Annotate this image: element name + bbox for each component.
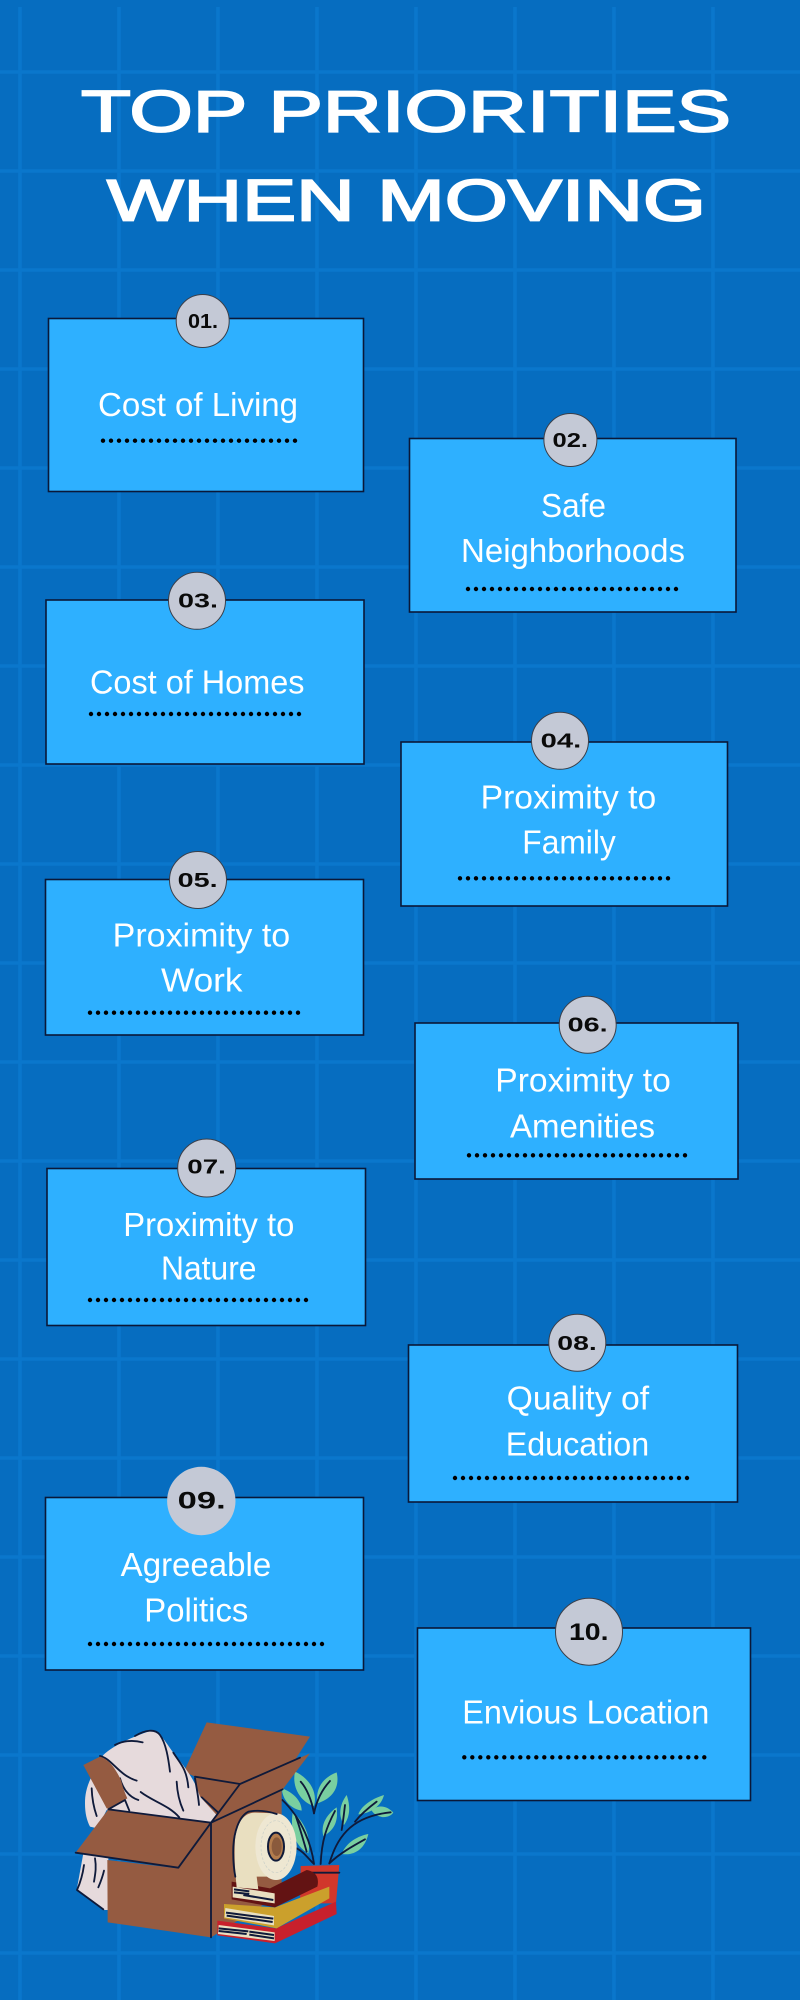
panel: 06 Proximity to Amenities: Amenities — [510, 1108, 655, 1145]
panel: 07 Proximity to Nature: Proximity to — [123, 1206, 294, 1243]
panel: 04 Proximity to Family: Proximity to — [481, 778, 656, 815]
panel: 08 Quality of Education: Quality of — [507, 1379, 650, 1416]
icon: tape roll — [233, 1811, 297, 1889]
panel: 04 Proximity to Family — [401, 712, 728, 906]
panel: 06 Proximity to Amenities: Proximity to — [495, 1062, 671, 1099]
panel: 01 Cost of Living — [48, 294, 364, 492]
panel: 08 Quality of Education — [408, 1314, 738, 1502]
title — [81, 80, 731, 234]
icon: stack of books — [217, 1870, 337, 1943]
panel: 08 Quality of Education: 08. — [557, 1333, 597, 1355]
panel: 07 Proximity to Nature — [47, 1139, 366, 1326]
panel: 02 Safe Neighborhoods: Safe — [541, 487, 606, 524]
panel: 10 Envious Location: Envious Location — [462, 1693, 709, 1730]
panel: 05 Proximity to Work: 05. — [178, 870, 218, 892]
panel: 05 Proximity to Work: Work — [161, 962, 243, 999]
panel: 10 Envious Location: 10. — [569, 1619, 608, 1646]
icon: plant pot — [300, 1865, 339, 1903]
panel: 10 Envious Location — [418, 1598, 750, 1800]
panel: 06 Proximity to Amenities — [415, 996, 738, 1179]
panel: 09 Agreeable Politics: Politics — [144, 1592, 248, 1629]
panel: 05 Proximity to Work: Proximity to — [113, 917, 290, 954]
panel: 08 Quality of Education: Education — [506, 1426, 649, 1463]
panel: 05 Proximity to Work — [46, 852, 364, 1035]
panel: 02 Safe Neighborhoods: Neighborhoods — [461, 532, 685, 569]
title: TOP PRIORITIES — [81, 80, 731, 144]
panel: 02 Safe Neighborhoods: 02. — [552, 430, 588, 452]
panel: 07 Proximity to Nature: 07. — [187, 1156, 226, 1178]
panel: 07 Proximity to Nature: Nature — [161, 1250, 256, 1287]
panel: 09 Agreeable Politics: 09. — [178, 1488, 226, 1514]
icon: cardboard box — [76, 1753, 310, 1937]
icon: box back flap — [184, 1722, 310, 1817]
panel: 03 Cost of Homes: Cost of Homes — [90, 663, 304, 700]
panel: 01 Cost of Living: 01. — [188, 311, 218, 333]
panel: 06 Proximity to Amenities: 06. — [568, 1014, 608, 1036]
panel: 09 Agreeable Politics: Agreeable — [121, 1546, 271, 1583]
title: WHEN MOVING — [107, 168, 706, 234]
panel: 09 Agreeable Politics — [46, 1467, 364, 1670]
panel: 02 Safe Neighborhoods — [410, 414, 736, 612]
panel: 04 Proximity to Family: Family — [522, 823, 616, 860]
icon: cloth — [77, 1730, 217, 1910]
panel: 03 Cost of Homes — [46, 572, 364, 764]
panel: 04 Proximity to Family: 04. — [541, 730, 581, 752]
illustration: moving box with tape, books and plant — [76, 1722, 393, 1943]
icon: plant — [282, 1772, 393, 1864]
panel: 03 Cost of Homes: 03. — [178, 590, 218, 612]
panel: 01 Cost of Living: Cost of Living — [98, 386, 298, 423]
